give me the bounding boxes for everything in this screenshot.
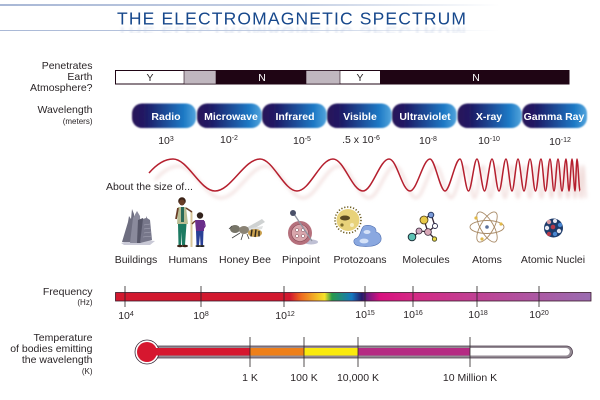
size comparison labels: Humans bbox=[168, 254, 208, 266]
frequency values: 10 bbox=[118, 310, 130, 322]
row label: wavelength: Wavelength bbox=[37, 104, 93, 116]
frequency values: 10 bbox=[529, 309, 541, 321]
electromagnetic spectrum infographic: THE ELECTROMAGNETIC SPECTRUM bbox=[117, 23, 466, 43]
frequency values: 10 bbox=[275, 310, 287, 322]
frequency values: 10 bbox=[468, 309, 480, 321]
icon: honey bee bbox=[229, 219, 265, 240]
temperature values: 1 K bbox=[242, 372, 258, 384]
atmosphere penetration bar bbox=[116, 70, 569, 84]
frequency values: 10 bbox=[403, 309, 415, 321]
wavelength values: -8 bbox=[431, 136, 437, 143]
wavelength band pills: Visible bbox=[343, 111, 377, 123]
icon: pinpoint through button bbox=[288, 210, 318, 245]
wavelength values: 10 bbox=[158, 135, 170, 147]
size comparison labels: Honey Bee bbox=[219, 254, 271, 266]
wavelength values bbox=[158, 134, 571, 148]
frequency values: 16 bbox=[415, 310, 423, 317]
wavelength band pills bbox=[132, 104, 587, 128]
size comparison labels: Atomic Nuclei bbox=[521, 254, 585, 266]
temperature values: 10 Million K bbox=[443, 372, 497, 384]
wavelength band pills: Ultraviolet bbox=[399, 111, 451, 123]
red wave increasing in frequency bbox=[149, 159, 580, 191]
atmosphere penetration bar: Y bbox=[146, 72, 154, 84]
row label: temperature: (K) bbox=[82, 367, 93, 376]
wavelength band pills: X-ray bbox=[476, 111, 502, 123]
size comparison labels: Pinpoint bbox=[282, 254, 320, 266]
icon: humans bbox=[176, 197, 205, 247]
wavelength values: -10 bbox=[490, 136, 500, 143]
row label: penetrates atmosphere: Atmosphere? bbox=[30, 82, 93, 94]
wavelength band pills: Radio bbox=[151, 111, 181, 123]
size comparison labels: Protozoans bbox=[333, 254, 387, 266]
atmosphere penetration bar: N bbox=[472, 72, 480, 84]
row label: frequency: (Hz) bbox=[77, 298, 93, 307]
row label: penetrates atmosphere: Earth bbox=[67, 71, 93, 83]
row label: temperature: the wavelength bbox=[22, 354, 93, 366]
row label: wavelength: (meters) bbox=[63, 117, 93, 126]
temperature values: 100 K bbox=[290, 372, 318, 384]
frequency values: 12 bbox=[287, 311, 295, 318]
size comparison labels: Atoms bbox=[472, 254, 502, 266]
title: THE ELECTROMAGNETIC SPECTRUM bbox=[117, 8, 466, 28]
wavelength values: .5 x 10 bbox=[342, 134, 374, 146]
frequency values bbox=[118, 309, 549, 322]
size comparison labels: Molecules bbox=[402, 254, 450, 266]
wavelength values: -5 bbox=[305, 136, 311, 143]
frequency values: 18 bbox=[480, 310, 488, 317]
wavelength values: 3 bbox=[170, 136, 174, 143]
wavelength band pills: Gamma Ray bbox=[524, 111, 585, 123]
atmosphere penetration bar: N bbox=[258, 72, 266, 84]
thermometer bbox=[135, 337, 572, 367]
frequency values: 10 bbox=[355, 309, 367, 321]
row label: frequency: Frequency bbox=[43, 286, 93, 298]
temperature values bbox=[242, 372, 497, 384]
row label: temperature: Temperature bbox=[34, 332, 93, 344]
frequency values: 15 bbox=[367, 310, 375, 317]
row label: temperature: of bodies emitting bbox=[10, 343, 93, 355]
wavelength values: -6 bbox=[374, 135, 380, 142]
wavelength values: 10 bbox=[419, 135, 431, 147]
frequency spectrum bar bbox=[116, 286, 591, 307]
frequency values: 20 bbox=[541, 310, 549, 317]
wavelength values: 10 bbox=[220, 134, 232, 146]
size comparison labels bbox=[115, 254, 585, 266]
wavelength values: 10 bbox=[478, 135, 490, 147]
icon: atomic nucleus bbox=[544, 218, 563, 238]
about the size of label: About the size of... bbox=[106, 181, 193, 193]
row label: penetrates atmosphere: Penetrates bbox=[42, 60, 92, 72]
wavelength values: 10 bbox=[549, 136, 561, 148]
wavelength values: -2 bbox=[232, 135, 238, 142]
atmosphere penetration bar: Y bbox=[356, 72, 364, 84]
frequency values: 8 bbox=[205, 311, 209, 318]
icon: buildings bbox=[121, 209, 155, 245]
wavelength values: -12 bbox=[561, 137, 571, 144]
wavelength band pills: Infrared bbox=[275, 111, 315, 123]
frequency values: 10 bbox=[193, 310, 205, 322]
size comparison labels: Buildings bbox=[115, 254, 157, 266]
icon: atom bbox=[470, 209, 504, 245]
wavelength band pills: Microwave bbox=[204, 111, 258, 123]
temperature values: 10,000 K bbox=[337, 372, 379, 384]
icon: protozoans bbox=[335, 207, 381, 247]
frequency values: 4 bbox=[130, 311, 134, 318]
icon: molecule bbox=[408, 212, 438, 241]
wavelength values: 10 bbox=[293, 135, 305, 147]
